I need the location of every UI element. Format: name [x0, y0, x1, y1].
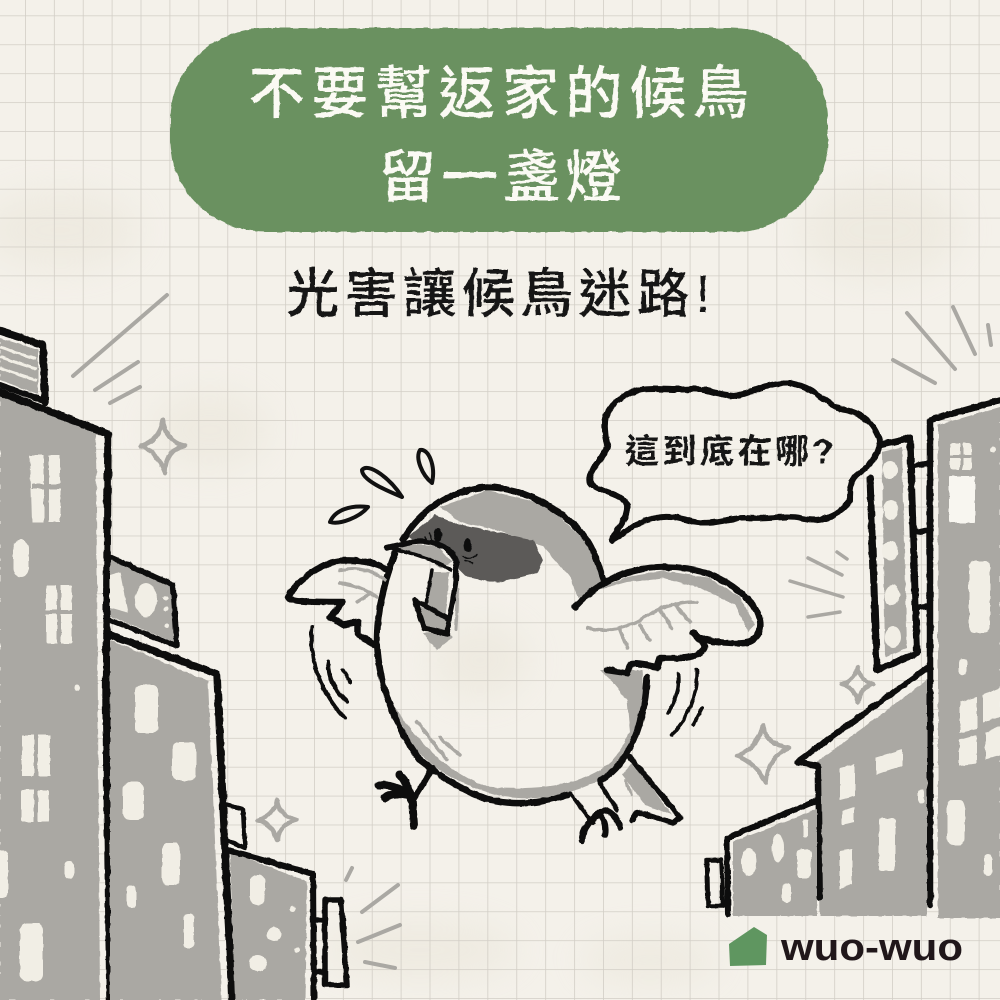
bubble outline: [590, 383, 880, 540]
small sign: [707, 860, 723, 906]
low building: [727, 800, 818, 916]
sweat drops: [330, 450, 433, 523]
building 3: [228, 850, 314, 1000]
dark face mask: [408, 515, 543, 583]
title text: 留一盞燈: [379, 146, 627, 210]
left ray lines: [73, 295, 167, 403]
subtitle: 光害讓候鳥迷路!: [286, 265, 716, 324]
building 1: [0, 392, 110, 1000]
right wing: [575, 567, 760, 673]
tail: [622, 757, 680, 823]
vertical sign: [870, 438, 930, 670]
logo wordmark: wuo-wuo: [780, 927, 963, 969]
head cap: [440, 490, 605, 598]
small box on building 2: [227, 805, 245, 848]
title text: [248, 62, 756, 210]
beak and mouth: [387, 542, 458, 634]
left sparkles: [141, 420, 296, 840]
right leg and foot: [570, 783, 620, 841]
right sparkles: [737, 667, 873, 783]
side sign on building 1: [110, 557, 177, 646]
body shadows: [390, 670, 645, 798]
logo: [729, 927, 963, 969]
side sign on building 3: [314, 900, 347, 985]
left motion lines: [311, 627, 350, 718]
middle building: [797, 668, 927, 916]
right top ray lines: [893, 307, 991, 383]
speech bubble: [590, 383, 880, 540]
roof sign: [0, 331, 45, 402]
logo house icon: [729, 927, 767, 966]
building 2: [110, 635, 232, 1000]
title banner: [170, 28, 828, 232]
body outline: [377, 553, 647, 803]
bottom left ray lines: [346, 868, 400, 968]
green pill: [170, 28, 828, 232]
eyes: [425, 528, 477, 563]
right buildings: [707, 400, 1000, 918]
left wing: [288, 560, 388, 645]
bubble text: 這到底在哪?: [625, 433, 837, 471]
title text: 不要幫返家的候鳥: [248, 62, 756, 126]
left leg and foot: [379, 768, 433, 826]
right middle ray lines: [790, 552, 847, 617]
left buildings: [0, 331, 347, 1000]
right motion lines: [668, 670, 702, 735]
lower belly feather marks: [417, 722, 460, 760]
bird: [288, 487, 760, 841]
tall building: [930, 400, 1000, 918]
